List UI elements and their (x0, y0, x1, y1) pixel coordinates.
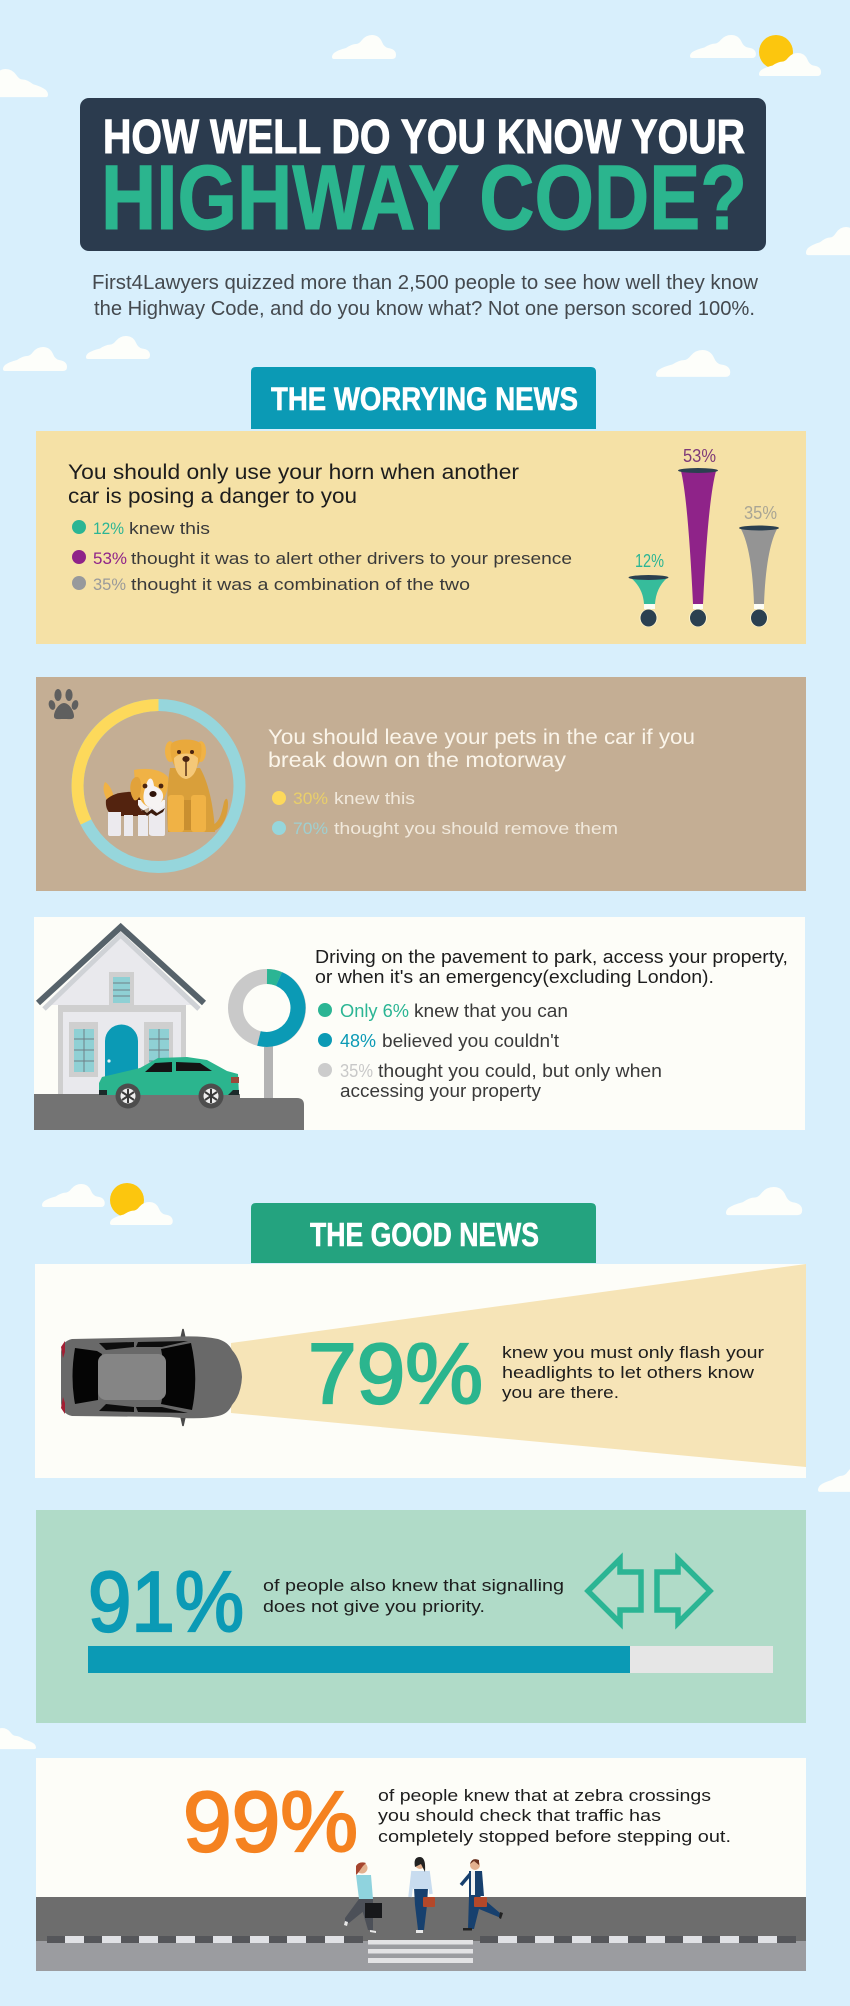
intro text: First4Lawyers quizzed more than 2,500 people to see how well they know (92, 272, 759, 294)
panel: horn (36, 431, 806, 644)
illustration: pedestrian woman with black bag (344, 1862, 382, 1933)
zebra text (378, 1786, 731, 1846)
pavement legend: 6% (318, 1001, 568, 1021)
signalling text: of people also knew that signalling (263, 1576, 564, 1595)
illustration: dogs (104, 740, 228, 836)
ground (34, 1094, 304, 1130)
horn heading: You should only use your horn when another (68, 461, 519, 484)
illustration: green car (99, 1057, 239, 1108)
pavement legend: 48%: believed you couldn't (382, 1031, 559, 1051)
headlights text: knew you must only flash your (502, 1343, 764, 1362)
horn bar: 35% (739, 503, 779, 627)
horn chart (628, 446, 779, 627)
pavement legend: 35%: accessing your property (340, 1081, 541, 1101)
zebra text: you should check that traffic has (378, 1806, 661, 1825)
intro text (92, 272, 759, 320)
icon: paw (48, 689, 79, 719)
pets heading: break down on the motorway (268, 749, 567, 772)
clouds and sun: good news (0, 1183, 850, 1749)
panel: zebra crossings (36, 1758, 806, 1971)
progress bar 91% (88, 1646, 773, 1673)
pavement legend: 6%: Only 6% (340, 1001, 409, 1021)
panel: headlights (35, 1264, 806, 1478)
headlights text: headlights to let others know (502, 1363, 755, 1382)
horn bar: 53% (678, 446, 718, 627)
pavement heading (315, 947, 788, 987)
road (36, 1897, 806, 1941)
title banner (80, 98, 766, 251)
illustration: house (38, 927, 204, 1094)
pets legend: 30%: 30% (293, 789, 328, 808)
zebra text: completely stopped before stepping out. (378, 1827, 731, 1846)
horn legend: 12%: 12% (93, 519, 124, 538)
donut chart: pets (78, 705, 240, 867)
signalling text: does not give you priority. (263, 1597, 485, 1616)
stat: 79%: 79% (308, 1327, 483, 1422)
pavement legend: 35% (318, 1061, 662, 1101)
panel: pavement (34, 917, 805, 1130)
panel: signalling (36, 1510, 806, 1723)
horn legend: 12%: knew this (129, 519, 210, 538)
pavement legend: 35%: 35% (340, 1061, 373, 1081)
headlights text: you are there. (502, 1383, 619, 1402)
door (105, 1024, 138, 1080)
pets legend: 30%: knew this (334, 789, 415, 808)
horn legend: 12% (72, 519, 210, 538)
pets heading: You should leave your pets in the car if you (268, 726, 695, 749)
big dog (165, 740, 228, 832)
pets heading (268, 726, 695, 772)
horn legend: 35%: thought it was a combination of the two (131, 575, 470, 594)
illustration: car from above (61, 1329, 242, 1426)
panel: pets (36, 677, 806, 891)
illustration: pedestrian woman with brown bag (410, 1857, 435, 1933)
horn heading (68, 461, 519, 508)
pavement legend: 48%: 48% (340, 1031, 376, 1051)
small dog (104, 769, 168, 836)
intro text: the Highway Code, and do you know what? Not one person scored 100%. (94, 298, 755, 320)
horn bar: 35%: 35% (744, 503, 777, 523)
pavement legend: 35%: thought you could, but only when (378, 1061, 662, 1081)
horn heading: car is posing a danger to you (68, 485, 357, 508)
pavement legend: 6%: knew that you can (414, 1001, 568, 1021)
section tab: the worrying news: THE WORRYING NEWS (271, 381, 578, 417)
windows (69, 972, 173, 1077)
horn bar: 53%: 53% (683, 446, 716, 466)
horn legend: 53%: 53% (93, 549, 127, 568)
pets legend: 70%: 70% (293, 819, 328, 838)
pets legend: 70%: thought you should remove them (334, 819, 618, 838)
headlights text (502, 1343, 764, 1402)
horn bar: 12% (628, 551, 668, 627)
pavement heading: or when it's an emergency(excluding London). (315, 967, 714, 987)
illustration: pedestrian man with brown bag (461, 1859, 503, 1930)
stat: 99%: 99% (183, 1775, 358, 1870)
horn bar: 12%: 12% (635, 551, 664, 571)
section tab: the good news (251, 1203, 596, 1263)
section tab: the good news: THE GOOD NEWS (310, 1216, 539, 1253)
signalling text (263, 1576, 564, 1616)
kerb dashes (47, 1936, 796, 1943)
zebra text: of people knew that at zebra crossings (378, 1786, 711, 1805)
sign post (264, 1045, 273, 1098)
zebra crossing (368, 1940, 473, 1963)
icon: indicator arrows (588, 1559, 710, 1623)
pavement strip (36, 1941, 806, 1971)
horn legend: 53%: thought it was to alert other drivers to your presence (131, 549, 572, 568)
pavement heading: Driving on the pavement to park, access your property, (315, 947, 788, 967)
pets legend: 30% (272, 789, 415, 808)
pavement legend: 48% (318, 1031, 559, 1051)
horn legend: 35%: 35% (93, 575, 126, 594)
stat: 91%: 91% (88, 1555, 244, 1650)
donut chart: pavement (236, 976, 298, 1040)
headlight beam (231, 1264, 806, 1467)
section tab: the worrying news (251, 367, 596, 429)
clouds and sun: header (0, 35, 850, 377)
